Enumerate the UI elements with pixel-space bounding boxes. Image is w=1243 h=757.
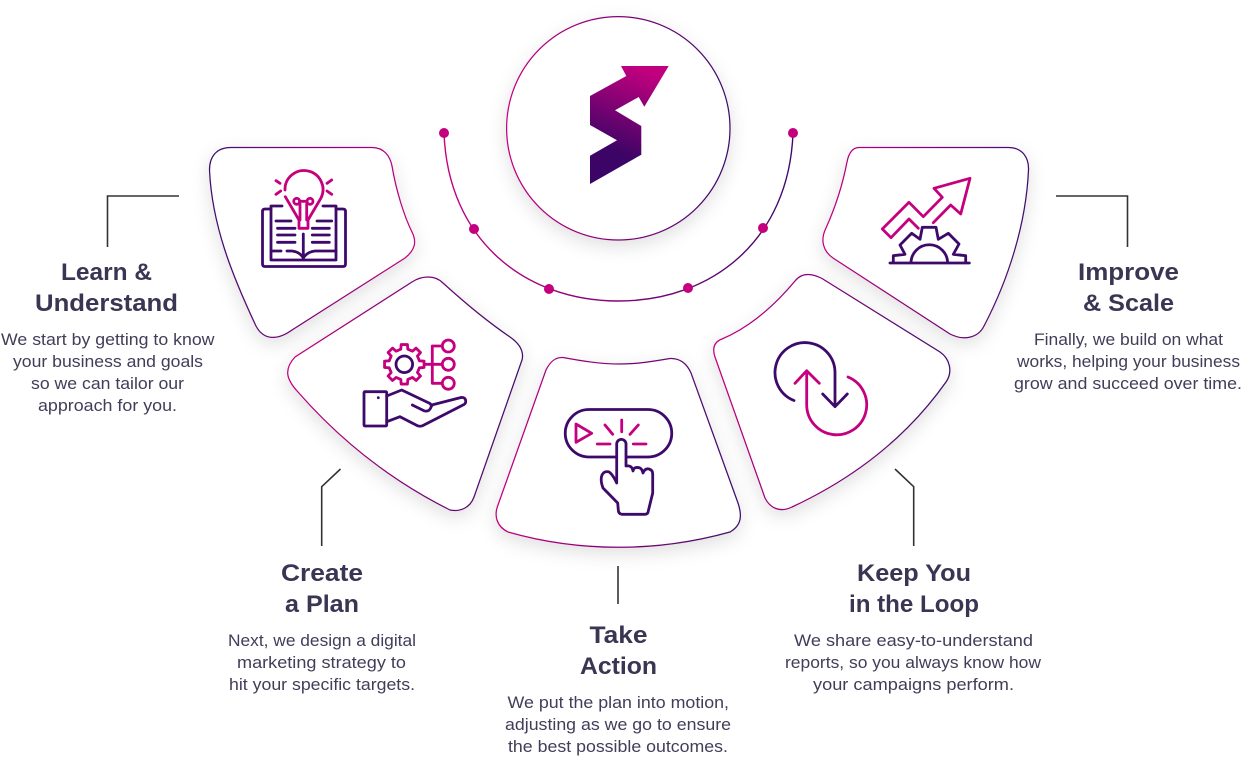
connector: learn: [108, 196, 179, 247]
connector: action: [617, 566, 619, 604]
text block: keep you in the loop: reports, so you always know how: [785, 654, 1041, 672]
text block: take action: Take: [590, 622, 648, 649]
icon: pointer clicking a button: [565, 410, 672, 514]
text block: take action: [505, 622, 731, 756]
text block: create a plan: hit your specific targets.: [229, 676, 415, 694]
text block: learn and understand: [1, 259, 215, 415]
text block: learn and understand: your business and goals: [13, 353, 203, 371]
icon: S arrow logo: [590, 66, 669, 184]
text block: improve and scale: & Scale: [1083, 290, 1174, 317]
text block: learn and understand: approach for you.: [38, 397, 177, 415]
connector: improve: [1056, 196, 1128, 247]
central logo circle: [507, 17, 730, 240]
text block: improve and scale: Improve: [1078, 259, 1179, 286]
text block: keep you in the loop: your campaigns perform.: [813, 676, 1014, 694]
connecting arc with dots: [439, 128, 798, 301]
text block: create a plan: Create: [281, 560, 363, 587]
connector: plan: [322, 469, 340, 546]
text block: keep you in the loop: Keep You: [857, 560, 971, 587]
text block: improve and scale: Finally, we build on what: [1034, 331, 1223, 349]
icon: book and light bulb: [262, 171, 346, 266]
text block: keep you in the loop: We share easy-to-understand: [794, 632, 1033, 650]
text block: improve and scale: works, helping your business: [1016, 353, 1240, 371]
text block: learn and understand: We start by getting to know: [1, 331, 215, 349]
text block: take action: We put the plan into motion,: [508, 694, 729, 712]
text block: improve and scale: [1014, 259, 1242, 393]
text block: create a plan: [228, 560, 416, 694]
icon: loop arrows: [775, 343, 867, 435]
text block: learn and understand: so we can tailor our: [31, 375, 185, 393]
panel: take action card: [496, 357, 740, 547]
text block: improve and scale: grow and succeed over time.: [1014, 375, 1242, 393]
icon: growth arrow and gear: [882, 178, 970, 263]
panel: learn and understand card: [210, 148, 415, 337]
text block: keep you in the loop: in the Loop: [849, 591, 979, 618]
panel: keep you in the loop card: [714, 274, 950, 510]
text block: take action: Action: [580, 653, 657, 680]
text block: take action: the best possible outcomes.: [508, 738, 728, 756]
panel: improve and scale card: [823, 148, 1029, 338]
text block: create a plan: Next, we design a digital: [228, 632, 416, 650]
text block: keep you in the loop: [785, 560, 1041, 694]
text block: create a plan: a Plan: [285, 591, 359, 618]
panel: create a plan card: [288, 277, 522, 510]
text block: create a plan: marketing strategy to: [237, 654, 406, 672]
icon: gear, network and hand: [364, 340, 466, 426]
text block: learn and understand: Understand: [35, 290, 178, 317]
text block: take action: adjusting as we go to ensure: [505, 716, 731, 734]
connector: loop: [895, 469, 914, 546]
text block: learn and understand: Learn &: [61, 259, 152, 286]
